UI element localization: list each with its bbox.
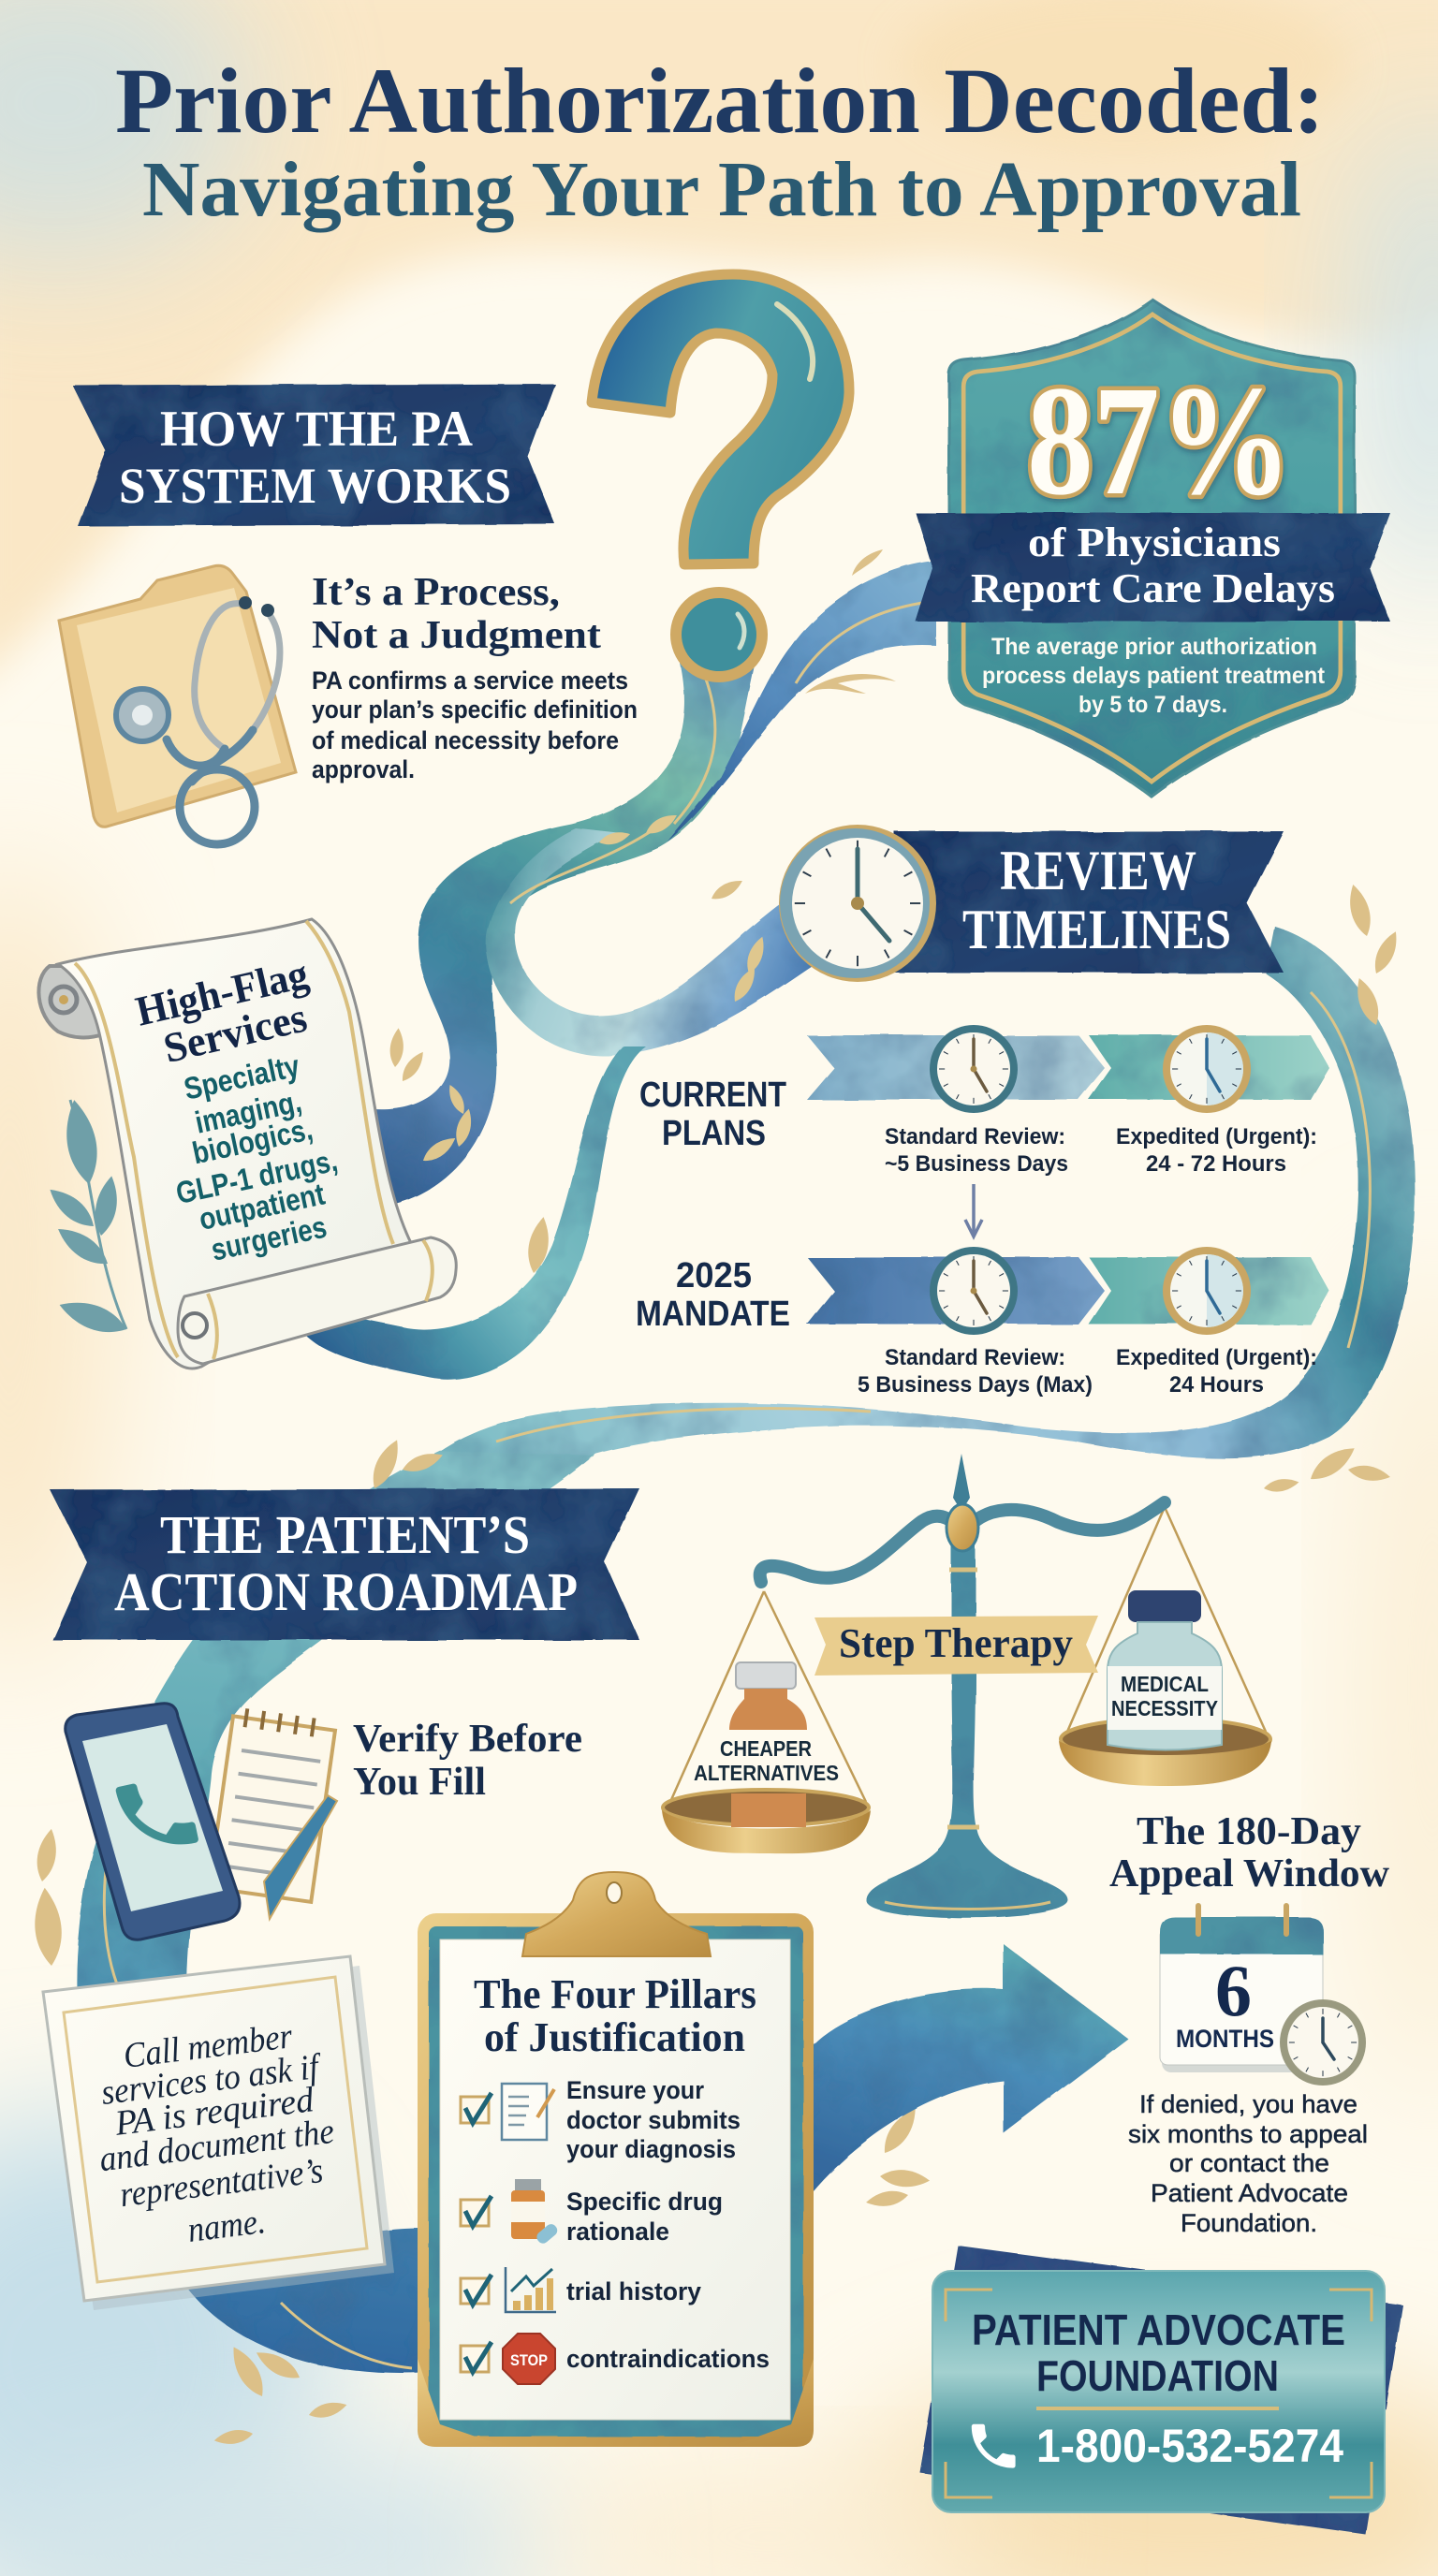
arrow: to appeal window bbox=[813, 1944, 1128, 2191]
panel: high-flag services scroll bbox=[38, 919, 456, 1368]
text block: it's a process: It’s a Process, bbox=[312, 571, 560, 614]
right bottle: medical necessity bbox=[1108, 1590, 1222, 1750]
chevron: expedited review bbox=[1089, 1025, 1329, 1177]
panel: 87% shield bbox=[916, 300, 1390, 797]
label: current plans: CURRENT bbox=[639, 1076, 786, 1115]
left pan back bbox=[663, 1790, 869, 1825]
icon: phone bbox=[972, 2424, 1016, 2468]
banner: of physicians bbox=[916, 513, 1390, 622]
scroll heading bbox=[131, 950, 313, 1072]
right bottle: medical necessity: MEDICAL bbox=[1121, 1672, 1209, 1696]
text block: 180-day appeal window: Appeal Window bbox=[1109, 1852, 1390, 1895]
icon: calendar six months bbox=[1160, 1906, 1366, 2086]
icon: phone and notepad bbox=[66, 1704, 337, 1939]
label: 2025 mandate bbox=[636, 1256, 790, 1334]
chevron: standard review max: Standard Review: bbox=[885, 1345, 1065, 1370]
section banner: patient's action roadmap: ACTION ROADMAP bbox=[114, 1561, 578, 1622]
label: current plans: PLANS bbox=[662, 1114, 766, 1153]
note: call member services: PA is required bbox=[112, 2080, 316, 2144]
banner: of physicians: of Physicians bbox=[1028, 520, 1281, 565]
chevron: standard review: ~5 Business Days bbox=[885, 1151, 1068, 1177]
scroll list: imaging, bbox=[192, 1084, 304, 1140]
timeline row: 2025 mandate bbox=[636, 1247, 1329, 1398]
label: step therapy: Step Therapy bbox=[839, 1620, 1073, 1666]
heading: verify before you fill: Verify Before bbox=[353, 1718, 582, 1761]
icon: folder with stethoscope bbox=[59, 565, 296, 844]
chevron: expedited review 24h: Expedited (Urgent): bbox=[1116, 1345, 1317, 1370]
heading: verify before you fill bbox=[353, 1718, 582, 1804]
chevron: expedited review 24h bbox=[1089, 1247, 1329, 1398]
panel: patient advocate foundation contact card: 1-800-532-5274 bbox=[1036, 2420, 1343, 2472]
right pan bbox=[1059, 1741, 1271, 1786]
text block: it's a process: approval. bbox=[312, 755, 415, 783]
pillar: trial history: trial history bbox=[566, 2277, 701, 2305]
icon: large clock bbox=[779, 825, 936, 982]
decorative leaf sprigs bbox=[32, 549, 1402, 2447]
text block: if denied: Patient Advocate bbox=[1151, 2179, 1348, 2207]
text block: 180-day appeal window: The 180-Day bbox=[1137, 1810, 1361, 1853]
text block: 180-day appeal window bbox=[1109, 1810, 1390, 1895]
shield caption bbox=[982, 634, 1326, 718]
text block: if denied: six months to appeal bbox=[1128, 2120, 1368, 2148]
left bottle: cheaper alternatives: CHEAPER bbox=[720, 1736, 812, 1761]
text block: if denied: If denied, you have bbox=[1139, 2090, 1357, 2118]
pillar: contraindications bbox=[461, 2334, 770, 2384]
clipboard heading bbox=[474, 1971, 756, 2060]
scale column bbox=[866, 1544, 1068, 1918]
note: call member services: and document the bbox=[97, 2112, 336, 2179]
left bottle: cheaper alternatives bbox=[694, 1662, 839, 1827]
text block: it's a process: of medical necessity before bbox=[312, 726, 619, 754]
scroll list: Specialty bbox=[181, 1047, 303, 1106]
panel: patient advocate foundation contact card: FOUNDATION bbox=[1036, 2351, 1279, 2400]
right bottle: medical necessity: NECESSITY bbox=[1111, 1696, 1218, 1720]
scroll list bbox=[173, 1047, 341, 1267]
section banner: patient's action roadmap bbox=[51, 1488, 639, 1640]
chevron: expedited review: Expedited (Urgent): bbox=[1116, 1124, 1317, 1149]
label: step therapy bbox=[814, 1616, 1098, 1676]
note: call member services: services to ask if bbox=[99, 2046, 324, 2113]
chevron: standard review max bbox=[807, 1247, 1105, 1398]
scroll list: outpatient bbox=[196, 1177, 328, 1237]
pen bbox=[264, 1795, 337, 1919]
scroll lower roll bbox=[178, 1237, 456, 1364]
pillar: drug rationale bbox=[461, 2179, 723, 2246]
panel: four pillars clipboard bbox=[418, 1872, 814, 2447]
pillar: drug rationale: Specific drug bbox=[566, 2188, 723, 2216]
chevron: standard review bbox=[807, 1025, 1105, 1177]
shield caption: The average prior authorization bbox=[991, 634, 1317, 660]
section banner: how the PA system works bbox=[73, 384, 555, 526]
left bottle: cheaper alternatives: ALTERNATIVES bbox=[694, 1761, 839, 1785]
title: Navigating Your Path to Approval bbox=[142, 146, 1301, 233]
icon: calendar six months: 6 bbox=[1215, 1950, 1252, 2031]
icon: calendar six months: MONTHS bbox=[1176, 2025, 1274, 2053]
calendar clock bbox=[1280, 1999, 1366, 2086]
text block: if denied: Foundation. bbox=[1181, 2209, 1317, 2237]
pillar: diagnosis bbox=[461, 2076, 741, 2163]
flowing ribbon path bbox=[77, 561, 1415, 2374]
icon: question mark bbox=[592, 274, 849, 677]
label: 2025 mandate: 2025 bbox=[676, 1256, 752, 1295]
section banner: how the PA system works: HOW THE PA bbox=[160, 401, 473, 457]
text block: it's a process: your plan’s specific definition bbox=[312, 695, 638, 724]
scroll list: biologics, bbox=[189, 1111, 315, 1170]
note: call member services bbox=[43, 1956, 394, 2310]
heading: verify before you fill: You Fill bbox=[353, 1761, 486, 1804]
right pan back bbox=[1061, 1719, 1270, 1760]
notepad bbox=[209, 1706, 336, 1902]
banner: of physicians: Report Care Delays bbox=[971, 565, 1335, 611]
text block: it's a process bbox=[312, 571, 638, 783]
text block: if denied: or contact the bbox=[1169, 2149, 1329, 2177]
pillar: contraindications: contraindications bbox=[566, 2345, 770, 2373]
pillar: diagnosis: Ensure your bbox=[566, 2076, 704, 2104]
title: Prior Authorization Decoded: bbox=[115, 49, 1325, 153]
label: 2025 mandate: MANDATE bbox=[636, 1295, 790, 1334]
chevron: standard review: Standard Review: bbox=[885, 1124, 1065, 1149]
shield caption: by 5 to 7 days. bbox=[1078, 692, 1227, 718]
scale beam bbox=[760, 1502, 1165, 1582]
text block: it's a process: PA confirms a service meets bbox=[312, 666, 628, 695]
note: call member services: representative’s bbox=[118, 2151, 325, 2215]
shield caption: process delays patient treatment bbox=[982, 663, 1326, 689]
timeline row: current plans bbox=[639, 1025, 1329, 1177]
section banner: review timelines bbox=[894, 831, 1284, 973]
clipboard heading: The Four Pillars bbox=[474, 1971, 756, 2017]
label: current plans bbox=[639, 1076, 786, 1153]
title bbox=[115, 49, 1325, 233]
section banner: review timelines: TIMELINES bbox=[962, 899, 1231, 960]
scale strings bbox=[670, 1507, 1266, 1802]
note: call member services: name. bbox=[185, 2202, 268, 2250]
scroll heading: Services bbox=[159, 993, 311, 1072]
section banner: patient's action roadmap: THE PATIENT’S bbox=[160, 1504, 530, 1565]
scroll list: surgeries bbox=[208, 1209, 330, 1267]
clipboard clip bbox=[522, 1872, 711, 1956]
phone bbox=[66, 1704, 240, 1939]
text block: it's a process: Not a Judgment bbox=[312, 614, 601, 657]
pillar: contraindications: STOP bbox=[510, 2351, 548, 2369]
stat: 87%: 87% bbox=[1027, 354, 1292, 528]
panel: patient advocate foundation contact card: PATIENT ADVOCATE bbox=[972, 2305, 1345, 2354]
chart: balance scale for step therapy bbox=[662, 1454, 1271, 1918]
section banner: review timelines: REVIEW bbox=[1000, 840, 1196, 901]
text block: if denied bbox=[1128, 2090, 1368, 2237]
chevron: expedited review: 24 - 72 Hours bbox=[1146, 1151, 1286, 1177]
section banner: how the PA system works: SYSTEM WORKS bbox=[119, 458, 511, 514]
chevron: expedited review 24h: 24 Hours bbox=[1169, 1372, 1264, 1398]
pillar: trial history bbox=[461, 2267, 701, 2312]
note: call member services: Call member bbox=[122, 2016, 295, 2076]
pillar: diagnosis: doctor submits bbox=[566, 2106, 741, 2134]
panel: patient advocate foundation contact card bbox=[919, 2246, 1402, 2535]
scroll heading: High-Flag bbox=[131, 950, 313, 1035]
pillar: drug rationale: rationale bbox=[566, 2217, 669, 2246]
clipboard heading: of Justification bbox=[484, 2014, 745, 2060]
arrow: current to mandate bbox=[965, 1184, 982, 1237]
left pan bbox=[662, 1810, 871, 1853]
pillar: diagnosis: your diagnosis bbox=[566, 2135, 736, 2163]
scroll list: GLP-1 drugs, bbox=[173, 1143, 341, 1210]
chevron: standard review max: 5 Business Days (Max) bbox=[858, 1372, 1093, 1398]
